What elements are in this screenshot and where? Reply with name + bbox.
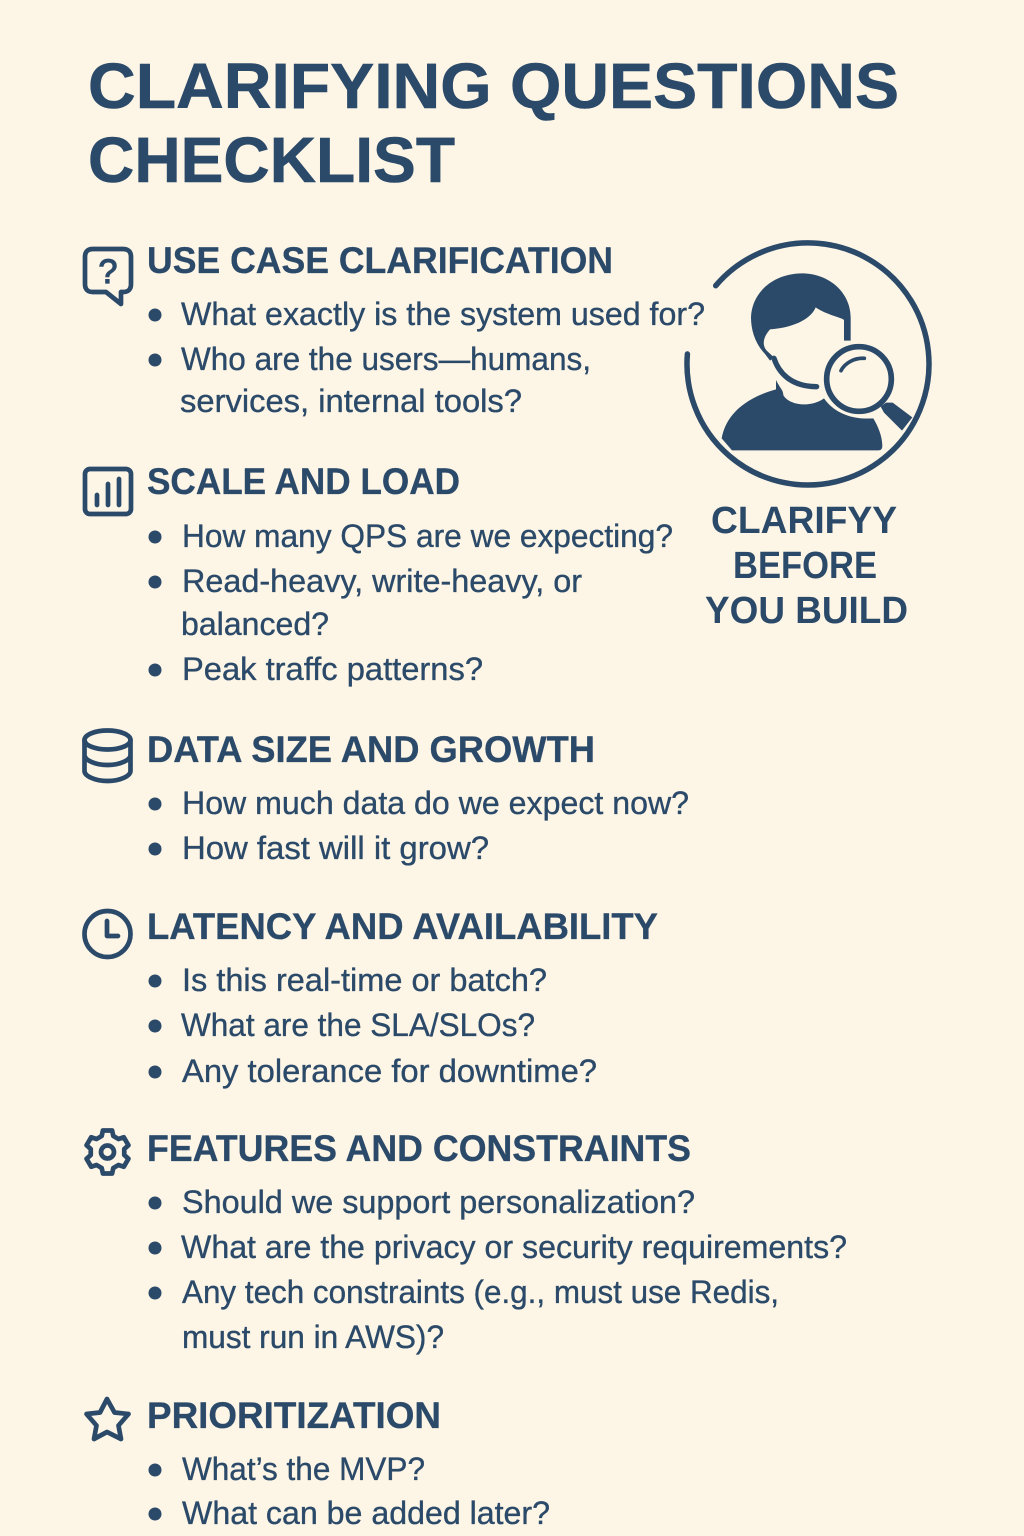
icon: star	[86, 1399, 128, 1439]
icon: bar chart	[85, 469, 131, 514]
caption: clarifyy before you build: YOU BUILD	[705, 590, 908, 632]
question list: latency: Any tolerance for downtime?	[182, 1053, 597, 1089]
question list: features: Should we support personalization?	[182, 1184, 695, 1220]
question list: scale	[148, 518, 673, 687]
question list: latency	[148, 962, 597, 1089]
caption: clarifyy before you build	[705, 500, 908, 632]
panel: data size and growth	[84, 729, 689, 866]
question list: features: What are the privacy or security requirements?	[181, 1229, 847, 1265]
heading: prioritization: PRIORITIZATION	[147, 1395, 441, 1436]
question list: latency: Is this real-time or batch?	[182, 962, 547, 998]
icon: speech bubble with question mark	[85, 249, 131, 304]
panel: prioritization	[86, 1395, 550, 1531]
title: CLARIFYING QUESTIONS	[88, 50, 899, 122]
title: CHECKLIST	[88, 124, 455, 196]
panel: latency and availability	[84, 906, 658, 1089]
question list: scale: How many QPS are we expecting?	[182, 518, 673, 554]
caption: clarifyy before you build: CLARIFYY	[711, 500, 897, 542]
icon: magnifying glass	[824, 344, 912, 431]
icon: speech bubble with question mark: ?	[99, 253, 117, 291]
question list: use case: What exactly is the system used for?	[181, 296, 705, 332]
icon: gear	[87, 1130, 128, 1174]
question list: features	[148, 1184, 847, 1355]
question list: use case	[148, 296, 705, 419]
question list: latency: What are the SLA/SLOs?	[181, 1007, 535, 1043]
illustration: person with magnifying glass	[687, 243, 929, 485]
question list: use case: services, internal tools?	[180, 383, 522, 419]
question list: prioritization: What’s the MVP?	[182, 1451, 425, 1487]
icon: person	[722, 273, 882, 450]
icon: clock	[84, 911, 130, 957]
heading: data size and growth: DATA SIZE AND GROWTH	[147, 729, 595, 770]
question list: data	[148, 785, 689, 866]
heading: scale and load: SCALE AND LOAD	[147, 461, 460, 502]
ring	[687, 243, 929, 485]
question list: features: must run in AWS)?	[182, 1319, 444, 1355]
icon: database cylinder	[84, 730, 130, 781]
caption: clarifyy before you build: BEFORE	[733, 545, 877, 587]
panel: features and constraints	[87, 1128, 847, 1355]
heading: use case clarification: USE CASE CLARIFICATION	[147, 240, 613, 281]
heading: latency and availability: LATENCY AND AVAILABILITY	[147, 906, 658, 947]
question list: scale: balanced?	[181, 606, 329, 642]
question list: prioritization	[148, 1451, 550, 1531]
panel: scale and load	[85, 461, 673, 687]
question list: data: How fast will it grow?	[182, 830, 489, 866]
panel: use case clarification	[85, 240, 705, 419]
heading: features and constraints: FEATURES AND CONSTRAINTS	[147, 1128, 691, 1169]
question list: scale: Read-heavy, write-heavy, or	[182, 563, 582, 599]
question list: prioritization: What can be added later?	[182, 1495, 550, 1531]
question list: data: How much data do we expect now?	[182, 785, 689, 821]
question list: use case: Who are the users—humans,	[181, 341, 591, 377]
title	[88, 50, 899, 196]
question list: scale: Peak traffc patterns?	[182, 651, 483, 687]
question list: features: Any tech constraints (e.g., must use Redis,	[182, 1274, 779, 1310]
